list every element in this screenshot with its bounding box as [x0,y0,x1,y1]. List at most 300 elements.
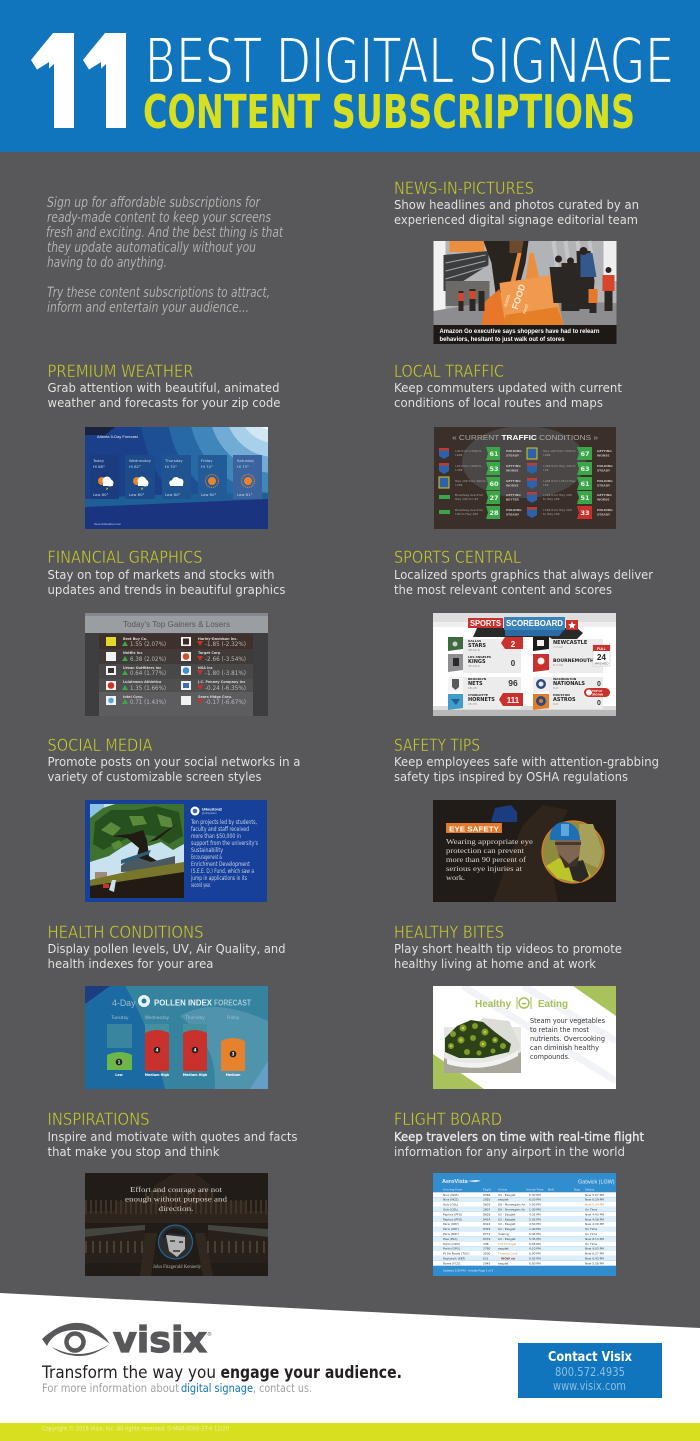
scoreboard thumbnail: CHARLOTTE [468,693,488,697]
traffic thumbnail: I-494 from Hwy 100 to [543,464,576,468]
stocks thumbnail: Target Corp [198,651,221,655]
flight table thumbnail: WOW air [501,1256,516,1260]
traffic thumbnail: Broadway Ave from [455,508,483,512]
scoreboard thumbnail: NEWCASTLE [553,640,588,646]
traffic thumbnail: Broadway Ave from [455,493,483,497]
intro text: ready-made content to keep your screens [47,210,271,226]
flight table thumbnail: U2 - EasyJet [498,1222,516,1226]
flight table thumbnail: 2945 [483,1261,491,1265]
flight table thumbnail: D8 - Norwegian Air [498,1208,526,1212]
healthy eating thumbnail: to retain the most [530,1026,589,1034]
scoreboard thumbnail: NATIONALS [553,681,585,687]
panel: inspirations: that make you stop and think [48,1144,220,1159]
stocks thumbnail: -0.17 (-6.67%) [205,699,246,706]
footer tagline: engage your audience. [220,1363,402,1383]
footer tagline: Transform the way you [41,1363,216,1383]
scoreboard thumbnail: HORNETS [468,697,495,703]
healthy eating thumbnail: can diminish healthy [530,1044,599,1052]
visix logo [42,1320,212,1361]
panel: flight board: FLIGHT BOARD [394,1110,502,1129]
stocks thumbnail: 1.35 (1.66%) [130,685,166,692]
panel: social media [48,736,300,902]
header banner [0,0,700,157]
weather thumbnail: Hi 88° [93,464,105,469]
flight table thumbnail: 5:05 PM [529,1217,541,1221]
pollen forecast thumbnail: 4 [194,1048,197,1052]
quote thumbnail: Effort and courage are not [130,1186,222,1194]
social post thumbnail: more than $50,000 in [191,834,241,840]
flight table thumbnail: AeroVista [442,1179,469,1185]
flight table thumbnail: Now 4:43 PM [585,1212,604,1216]
flight table thumbnail: Gatwick (LGW) [578,1180,615,1186]
stocks thumbnail: -1.80 (-3.81%) [205,670,246,677]
panel: sports central: SPORTS CENTRAL [394,548,522,567]
footer call to action [42,1381,312,1395]
panel: safety tips: Keep employees safe with attention-grabbing [394,754,659,769]
social post thumbnail [85,800,267,902]
scoreboard thumbnail: SCOREBOARD [506,619,563,628]
stocks thumbnail: Netflix Inc [123,651,142,655]
scoreboard thumbnail: DALLAS [468,639,481,643]
safety thumbnail: Wearing appropriate eye [446,839,533,846]
stocks thumbnail: -2.66 (-3.54%) [205,656,246,663]
scoreboard thumbnail: 96 [508,678,518,688]
traffic thumbnail: BETTER [506,498,520,502]
traffic thumbnail: 67 [580,450,590,458]
footer call to action: , contact us. [253,1381,312,1395]
traffic thumbnail: HOLDING [597,508,613,512]
traffic thumbnail: GETTING [506,464,521,468]
flight table thumbnail: 4:50 PM [529,1222,541,1226]
scoreboard thumbnail: 0-0 [553,702,558,706]
weather thumbnail: Friday [201,458,213,463]
flight table thumbnail: 8628 [483,1212,491,1216]
flight table thumbnail: Oslo (OSL) [443,1203,458,1207]
traffic thumbnail: WORSE [597,498,609,502]
scoreboard thumbnail: ASTROS [553,697,576,703]
stocks thumbnail: Sears Hldgs Corp. [198,695,232,699]
pollen forecast thumbnail: 3 [232,1052,235,1056]
flight table thumbnail: Nice (NCE) [443,1198,459,1202]
traffic thumbnail: Hwy 100 to I-94 [455,497,478,501]
traffic thumbnail: GETTING [597,449,612,453]
flight table thumbnail [433,1173,616,1276]
traffic thumbnail: I-394 from Hwy 169 [543,508,572,512]
traffic thumbnail: STEADY [597,484,611,488]
weather thumbnail: Hi 70° [165,464,177,469]
panel: flight board [394,1110,644,1276]
stocks thumbnail: Best Buy Co. [123,637,147,641]
pollen forecast thumbnail: 1 [118,1060,121,1064]
flight table thumbnail: Now 5:58 PM [585,1261,604,1265]
flight table thumbnail: 1:30 PM [529,1208,541,1212]
flight table thumbnail: U2 - EasyJet [498,1237,516,1241]
safety thumbnail [433,800,616,902]
news photo thumbnail: Amazon Go executive says shoppers have had to relearn [440,328,600,335]
news photo thumbnail [434,241,616,344]
panel: financial graphics: Stay on top of markets and stocks with [48,567,274,582]
footer white slant [0,1293,700,1441]
flight table thumbnail: Paris (ORY) [443,1227,459,1231]
traffic thumbnail: 27 [489,494,499,502]
numeral 11: 1 [24,5,99,157]
flight table thumbnail: Paris (ORY) [443,1232,459,1236]
flight table thumbnail: D8 - Norwegian Air [498,1203,526,1207]
healthy eating thumbnail [433,986,616,1089]
healthy eating thumbnail: Eating [538,998,568,1010]
flight table thumbnail: Arrival Time [526,1188,544,1192]
flight table thumbnail: 2807 [483,1208,491,1212]
flight table thumbnail: On Time [585,1242,597,1246]
panel: health conditions: health indexes for your area [48,956,214,971]
panel: health conditions: Display pollen levels, UV, Air Quality, and [48,941,286,956]
traffic thumbnail: 63 [580,465,590,473]
copyright bar: Copyright © 2018 Visix, Inc. All rights reserved. D-MAR-0000-2T-6 12/20 [42,1424,229,1432]
traffic thumbnail: HOLDING [597,479,613,483]
flight table thumbnail: 2920 [483,1198,491,1202]
scoreboard thumbnail: 2 [511,640,516,649]
traffic thumbnail: I-394 from Hwy 100 [543,493,572,497]
flight table thumbnail: 6:05 PM [529,1256,541,1260]
flight table thumbnail: Now 4:39 PM [585,1222,604,1226]
panel: local traffic: Keep commuters updated with current [394,380,622,395]
traffic thumbnail: I-694 [455,453,463,457]
weather thumbnail: Low 81° [237,492,253,497]
flight table thumbnail: Pt De Rosas (TUG) [443,1252,469,1256]
quote thumbnail: direction. [158,1205,194,1213]
panel: health conditions [48,923,286,1089]
flight table thumbnail: 6:05 PM [529,1242,541,1246]
flight table thumbnail: Arriving From [443,1188,463,1192]
panel: flight board: information for any airport in the world [394,1144,625,1159]
stocks thumbnail: -0.24 (-6.35%) [205,685,246,692]
panel: healthy bites: healthy living at home and at work [394,956,597,971]
flight table thumbnail: Rome (FCO) [443,1261,460,1265]
flight table thumbnail: Thomas Cook [497,1252,518,1256]
flight table thumbnail: 8772 [483,1232,491,1236]
stocks thumbnail: 0.71 (1.43%) [130,699,166,706]
traffic thumbnail: 60 [489,480,499,488]
scoreboard thumbnail: FULL [597,647,607,651]
footer tagline [41,1363,402,1383]
traffic thumbnail: GETTING [506,479,521,483]
panel: local traffic: LOCAL TRAFFIC [394,362,504,381]
flight table thumbnail: 8376 [483,1237,491,1241]
stocks thumbnail: -1.85 (-2.32%) [205,641,246,648]
pollen forecast thumbnail [85,986,268,1089]
scoreboard thumbnail: BROOKLYN [468,677,487,681]
scoreboard thumbnail: NETS [468,681,483,687]
flight table thumbnail: U2 - EasyJet [498,1217,516,1221]
flight table thumbnail: Oslo (OSL) [443,1208,458,1212]
social post thumbnail: @uhsystem [202,811,217,815]
stocks thumbnail: J.C. Penney Company Inc [197,680,245,684]
traffic thumbnail: Hwy 100 from I-394 to [543,449,576,453]
quote thumbnail [85,1173,268,1276]
flight table thumbnail: On Time [585,1208,597,1212]
traffic thumbnail: 61 [489,450,499,458]
scoreboard thumbnail: SPORTS [470,619,502,628]
traffic thumbnail: I-394 [455,483,463,487]
safety thumbnail: protection can prevent [446,848,524,855]
traffic thumbnail: to Hwy 169 [543,497,560,501]
flight table thumbnail: Porto (OPO) [443,1247,460,1251]
scoreboard thumbnail: 3RD INN [592,692,603,696]
stocks thumbnail: 0.64 (1.77%) [130,670,166,677]
safety thumbnail: more than 90 percent of [446,857,527,864]
traffic thumbnail: WORSE [597,454,609,458]
flight table thumbnail: Airline [498,1188,507,1192]
weather thumbnail: Atlanta 5-Day Forecast [97,434,139,439]
traffic thumbnail: 53 [489,465,499,473]
scoreboard thumbnail: TOP OF [592,689,603,693]
pollen forecast thumbnail: Friday [227,1015,240,1020]
flight table thumbnail: Now 6:42 PM [585,1256,604,1260]
social post thumbnail: second year. [191,883,211,889]
panel: healthy bites [394,923,622,1089]
panel: news-in-pictures: NEWS-IN-PICTURES [394,179,534,198]
traffic thumbnail: STEADY [506,512,520,516]
numeral 11: 1 [76,5,151,157]
flight table thumbnail: easyJet [498,1198,509,1202]
traffic thumbnail: STEADY [597,512,611,516]
stocks thumbnail: Today's Top Gainers & Losers [123,620,230,629]
panel: safety tips: safety tips inspired by OSHA regulations [394,769,628,784]
panel: sports central: the most relevant content and scores [394,582,612,597]
contact box [518,1343,662,1398]
scoreboard thumbnail: 35-29-5 [468,664,480,668]
flight table thumbnail: 5:35 PM [529,1237,541,1241]
pollen forecast thumbnail: Medium High [145,1073,170,1077]
scoreboard thumbnail: 24 [597,653,606,662]
footer call to action: digital signage [181,1381,253,1395]
safety thumbnail: serious eye injuries at [446,866,522,873]
pollen forecast thumbnail: Medium High [183,1073,208,1077]
traffic thumbnail: HOLDING [506,508,522,512]
stocks thumbnail: Urban Outfitters Inc [123,666,161,670]
social post thumbnail: Encouragement & [191,855,222,861]
panel: financial graphics [48,548,286,716]
flight table thumbnail: Vueling [498,1232,509,1236]
traffic thumbnail: I-394 [455,468,463,472]
intro text [46,195,283,316]
panel: financial graphics: updates and trends in beautiful graphics [48,582,286,597]
pollen forecast thumbnail: Thursday [184,1015,205,1020]
weather thumbnail: Low 80° [165,492,181,497]
traffic thumbnail: STEADY [506,454,520,458]
panel: safety tips: SAFETY TIPS [394,736,480,755]
panel: inspirations: Inspire and motivate with quotes and facts [48,1129,298,1144]
scoreboard thumbnail: 0-0 [553,686,558,690]
flight table thumbnail: Reykjavik (KEF) [443,1256,465,1260]
visix logo: visix [113,1320,207,1361]
footer call to action: For more information about [42,1381,179,1395]
flight table thumbnail: On Time [585,1227,597,1231]
panel: healthy bites: HEALTHY BITES [394,923,504,942]
panel: news-in-pictures: experienced digital signage editorial team [394,212,638,227]
stocks thumbnail: Intel Corp. [123,695,143,699]
flight table thumbnail: 6:40 PM [529,1232,541,1236]
flight table thumbnail: 8324 [483,1222,491,1226]
panel: health conditions: HEALTH CONDITIONS [48,923,204,942]
flight table thumbnail: 5603 [483,1203,491,1207]
panel: premium weather: PREMIUM WEATHER [48,362,194,381]
flight table thumbnail: E31 [483,1256,489,1260]
scoreboard thumbnail: MINS AGO [595,662,609,666]
traffic thumbnail: HOLDING [597,464,613,468]
flight table thumbnail: Paphos (PFO) [443,1217,462,1221]
flight table thumbnail: Now 5:07 PM [585,1193,604,1197]
social post thumbnail: UHouston@ [202,808,223,812]
stocks thumbnail: 6.38 (2.02%) [130,656,166,663]
intro text: fresh and exciting. And the best thing is that [46,225,283,241]
flight table thumbnail: Paris (ORY) [443,1222,459,1226]
traffic thumbnail: HOLDING [506,449,522,453]
flight table thumbnail: Pisa (PSA) [443,1237,458,1241]
flight table thumbnail: U2 - EasyJet [498,1212,516,1216]
traffic thumbnail: WORSE [506,484,518,488]
healthy eating thumbnail: Healthy [475,998,511,1010]
pollen forecast thumbnail: FORECAST [214,998,252,1008]
intro text: Sign up for affordable subscriptions for [47,195,261,211]
panel: news-in-pictures: Show headlines and photos curated by an [394,197,639,212]
flight table thumbnail: 6:00 PM [529,1261,541,1265]
panel: social media: SOCIAL MEDIA [48,736,153,755]
social post thumbnail: faculty and staff received [191,827,249,833]
flight table thumbnail: Status [585,1188,595,1192]
flight table thumbnail: Porto (OPO) [443,1242,460,1246]
pollen forecast thumbnail: 4-Day [112,998,136,1008]
panel: healthy bites: Play short health tip videos to promote [394,941,622,956]
scoreboard thumbnail [433,613,616,716]
intro text: they update automatically without you [47,240,256,256]
panel: safety tips [394,736,659,902]
flight table thumbnail: Nice (NCE) [443,1193,459,1197]
flight table thumbnail: easyJet [498,1247,509,1251]
traffic thumbnail: 33 [580,509,590,517]
traffic thumbnail: 28 [489,509,499,517]
panel: flight board: Keep travelers on time with real-time flight [394,1129,644,1144]
scoreboard thumbnail: KINGS [468,659,486,665]
weather thumbnail: Hi 73° [237,464,249,469]
safety thumbnail: work. [446,875,465,882]
panel: premium weather: weather and forecasts for your zip code [48,395,281,410]
flight table thumbnail: TAP Portugal [497,1242,516,1246]
flight table thumbnail: Now 4:58 PM [585,1217,604,1221]
scoreboard thumbnail: BOURNEMOUTH [553,658,594,664]
flight table thumbnail: 5:30 PM [529,1193,541,1197]
contact box: Contact Visix [548,1349,632,1365]
flight table thumbnail: Now 6:27 PM [585,1252,604,1256]
quote thumbnail: John Fitzgerald Kennedy [153,1265,202,1270]
scoreboard thumbnail: 111 [507,696,520,705]
flight table thumbnail: 8368 [483,1193,491,1197]
panel: inspirations [48,1110,298,1276]
healthy eating thumbnail: nutrients. Overcooking [530,1035,605,1043]
visix logo: ® [207,1331,212,1338]
pollen forecast thumbnail: Low [115,1073,123,1077]
flight table thumbnail: 8326 [483,1227,491,1231]
intro text: Try these content subscriptions to attract, [47,285,270,301]
scoreboard thumbnail: STARS [468,643,486,649]
scoreboard thumbnail: 0 [597,681,601,688]
healthy eating thumbnail: Steam your vegetables [530,1017,605,1025]
weather thumbnail: SevereWeather.com [94,522,122,526]
flight table thumbnail: Now 6:29 PM [585,1198,604,1202]
traffic thumbnail: I-35 [543,468,549,472]
flight table thumbnail: U2 - EasyJet [498,1227,516,1231]
flight table thumbnail: easyJet [498,1261,509,1265]
traffic thumbnail: « CURRENT TRAFFIC CONDITIONS » [452,433,598,442]
flight table thumbnail: 6:00 PM [529,1252,541,1256]
flight table thumbnail: 4:35 PM [529,1212,541,1216]
scoreboard thumbnail: 6-7-12 [553,663,563,667]
traffic thumbnail: I-694 [543,453,551,457]
quote thumbnail: enough without purpose and [125,1196,228,1204]
weather thumbnail: Wednesday [129,458,152,463]
traffic thumbnail: to Hwy 100 [543,512,560,516]
panel: sports central: Localized sports graphics that always deliver [394,567,654,582]
social post thumbnail: Enrichment Development [191,862,251,868]
panel: financial graphics: FINANCIAL GRAPHICS [48,548,202,567]
social post thumbnail: Sustainability [191,848,224,854]
traffic thumbnail: GETTING [506,493,521,497]
flight table thumbnail: Updated 5:30 PM · Arrivals Page 1 of 3 [443,1268,494,1272]
news photo thumbnail: behaviors, hesitant to just walk out of stores [440,336,565,343]
panel: inspirations: INSPIRATIONS [48,1110,150,1129]
flight table thumbnail: 6:20 PM [529,1198,541,1202]
flight table thumbnail: Now 5:34 PM [585,1203,604,1207]
panel: premium weather [48,272,410,542]
contact box: www.visix.com [553,1378,626,1393]
news photo thumbnail: FAST [522,303,530,314]
flight table thumbnail: 8424 [483,1217,491,1221]
news photo thumbnail: FOOD [510,282,528,311]
traffic thumbnail: I-52 [543,483,549,487]
scoreboard thumbnail: HOUSTON [553,693,570,697]
flight table thumbnail: Belt [548,1188,555,1192]
pollen forecast thumbnail: 4 [156,1048,159,1052]
scoreboard thumbnail: WASHINGTON [553,677,577,681]
weather thumbnail: Hi 74° [201,464,213,469]
stocks thumbnail: Harley-Davidson Inc. [198,637,238,641]
panel: local traffic [394,362,622,529]
weather thumbnail: Saturday [237,458,255,463]
weather thumbnail: Low 80° [201,492,217,497]
stocks thumbnail: Lululemon Athletica [123,680,162,684]
contact box: 800.572.4935 [555,1364,625,1379]
stocks thumbnail [85,613,268,716]
traffic thumbnail: Hwy 100 from 394 to [455,479,486,483]
traffic thumbnail: WORSE [506,468,518,472]
weather thumbnail: Hi 82° [129,464,141,469]
flight table thumbnail: 3500 [483,1252,491,1256]
scoreboard thumbnail: LOS ANGELES [468,655,491,659]
flight table thumbnail: Now 6:13 PM [585,1237,604,1241]
weather thumbnail [85,427,268,529]
flight table thumbnail: 2780 [483,1247,491,1251]
flight table thumbnail: On Time [585,1232,597,1236]
weather thumbnail: Low 80° [129,492,145,497]
weather thumbnail: Today [92,458,105,463]
safety thumbnail: EYE SAFETY [449,824,499,834]
traffic thumbnail: 61 [580,480,590,488]
traffic thumbnail: I-94 from I-35W to [455,449,482,453]
numeral 11 [31,33,126,128]
scoreboard thumbnail: 25-33 [468,702,477,706]
scoreboard thumbnail: 0 [511,659,516,668]
scoreboard thumbnail: 7-7-12 [553,645,563,649]
